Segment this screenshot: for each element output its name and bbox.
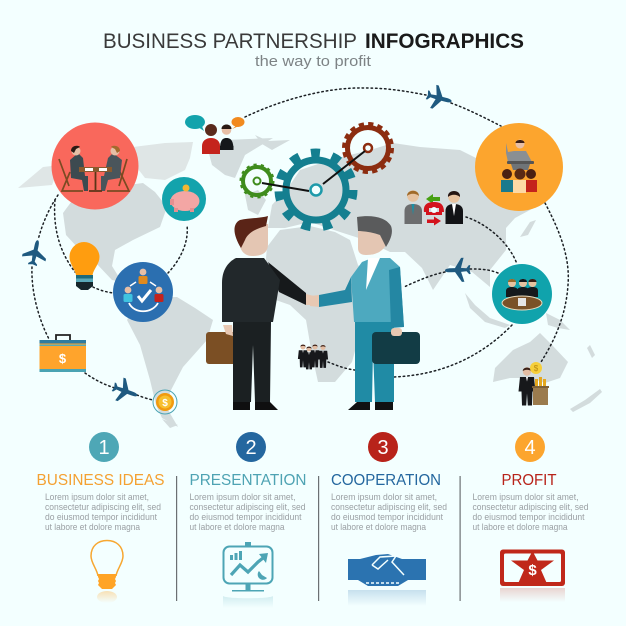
body text xyxy=(331,492,447,532)
icon: money briefcase: $ xyxy=(59,351,67,366)
divider xyxy=(460,476,461,601)
icon: star banknote xyxy=(500,550,565,602)
divider xyxy=(176,476,177,601)
body text: consectetur adipiscing elit, sed xyxy=(45,502,161,512)
badge 1: 1 xyxy=(98,437,110,459)
subtitle: the way to profit xyxy=(255,53,372,70)
icon: team check in blue circle xyxy=(113,262,173,322)
icon: teal gear xyxy=(262,151,365,227)
icon: brown gear xyxy=(345,125,391,171)
icon: businessman with gold coins: $ xyxy=(534,364,539,373)
icon: star banknote: $ xyxy=(528,562,537,579)
title: INFOGRAPHICS xyxy=(365,29,524,53)
icon: money briefcase xyxy=(40,335,86,372)
icon: airplane top xyxy=(424,83,455,113)
icon: piggy bank in teal circle xyxy=(162,177,206,221)
body text: do eiusmod tempor incididunt xyxy=(331,512,443,522)
icon: airplane left xyxy=(21,238,49,268)
badge 1 xyxy=(89,432,119,462)
icon: airplane right xyxy=(445,258,471,282)
icon: presentation board xyxy=(223,542,273,608)
body text xyxy=(472,492,588,532)
body text: consectetur adipiscing elit, sed xyxy=(331,502,447,512)
icon: businessman with gold coins xyxy=(518,362,549,406)
body text: Lorem ipsum dolor sit amet, xyxy=(45,492,149,502)
body text: ut labore et dolore magna xyxy=(190,522,285,532)
heading: PROFIT xyxy=(502,472,557,489)
badge 2: 2 xyxy=(245,437,257,459)
body text: do eiusmod tempor incididunt xyxy=(190,512,302,522)
icon: phone conversation xyxy=(404,190,463,226)
heading: COOPERATION xyxy=(331,472,441,489)
badge 4: 4 xyxy=(524,437,536,459)
icon: green gear xyxy=(242,166,272,196)
step 2: presentation xyxy=(190,432,306,608)
icon: board meeting in teal circle xyxy=(492,264,552,324)
body text xyxy=(45,492,161,532)
body text: consectetur adipiscing elit, sed xyxy=(190,502,306,512)
body text: consectetur adipiscing elit, sed xyxy=(472,502,588,512)
body text: Lorem ipsum dolor sit amet, xyxy=(331,492,437,502)
body text: ut labore et dolore magna xyxy=(331,522,427,532)
icon: gold coin: $ xyxy=(162,398,168,409)
heading: PRESENTATION xyxy=(190,472,306,489)
badge 3 xyxy=(368,432,398,462)
body text: do eiusmod tempor incididunt xyxy=(45,512,157,522)
title xyxy=(103,29,524,53)
badge 2 xyxy=(236,432,266,462)
badge 3: 3 xyxy=(377,437,389,459)
icon: airplane bottom xyxy=(109,375,141,407)
body text: ut labore et dolore magna xyxy=(45,522,141,532)
title: BUSINESS PARTNERSHIP xyxy=(103,29,357,53)
body text: Lorem ipsum dolor sit amet, xyxy=(190,492,296,502)
step 3: cooperation xyxy=(331,432,447,606)
body text: do eiusmod tempor incididunt xyxy=(472,512,585,522)
body text xyxy=(190,492,306,532)
step 1: business ideas xyxy=(36,432,164,603)
icon: group of businessmen xyxy=(298,344,328,369)
icon: meeting at table in red circle xyxy=(52,122,138,210)
world map xyxy=(18,135,602,428)
icon: orange lightbulb xyxy=(70,242,100,290)
icon: speaker and audience in orange circle xyxy=(475,123,563,211)
step 4: profit xyxy=(472,432,588,602)
body text: Lorem ipsum dolor sit amet, xyxy=(472,492,578,502)
right businessman xyxy=(310,216,420,410)
heading: BUSINESS IDEAS xyxy=(36,472,164,489)
icon: outline lightbulb xyxy=(91,540,123,603)
icon: two people talking xyxy=(185,115,244,154)
dotted routes xyxy=(32,88,568,400)
body text: ut labore et dolore magna xyxy=(472,522,568,532)
icon: handshake xyxy=(348,554,426,606)
left businessman xyxy=(206,216,318,410)
icon: gold coin xyxy=(153,390,177,414)
badge 4 xyxy=(515,432,545,462)
divider xyxy=(318,476,319,601)
